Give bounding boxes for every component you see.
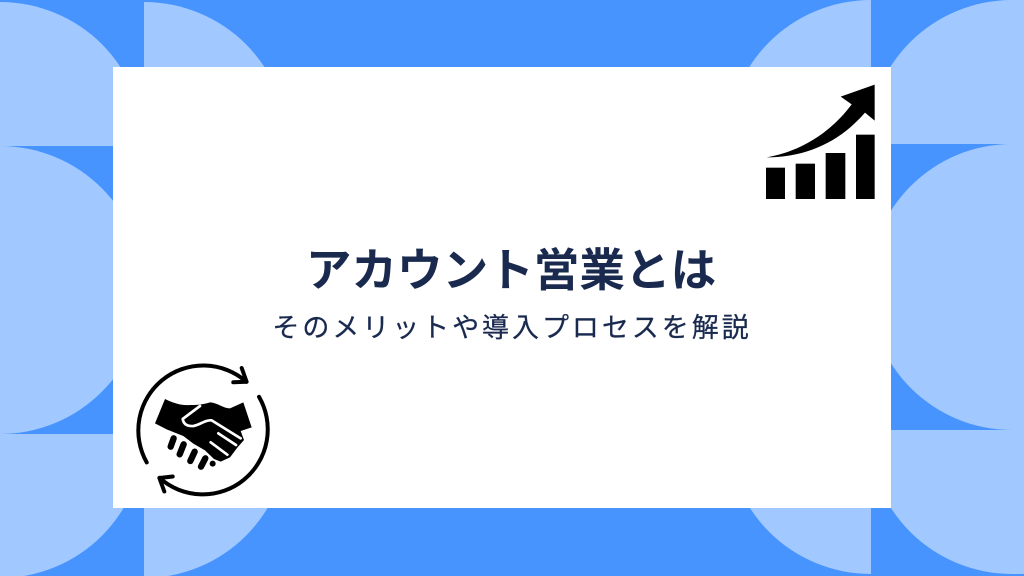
title: アカウント営業とは [306, 245, 716, 296]
white card panel [113, 67, 891, 508]
subtitle: そのメリットや導入プロセスを解説 [272, 313, 752, 343]
